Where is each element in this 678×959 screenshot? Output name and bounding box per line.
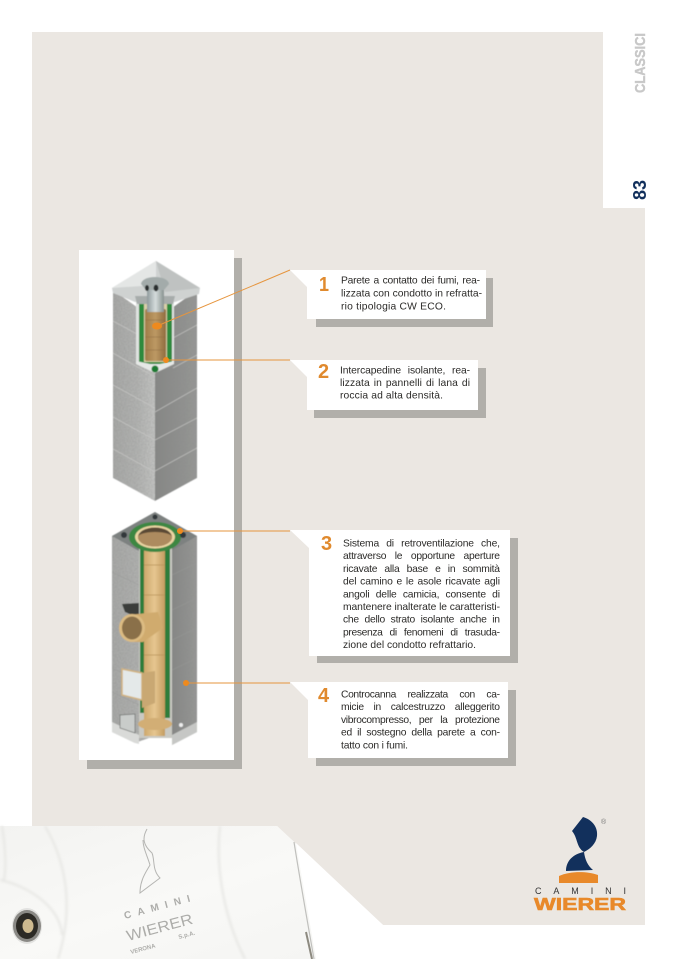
callout 3: 3: [321, 533, 332, 555]
logo wordmark: CAMINI: CAMINI: [535, 886, 626, 896]
callout 4: Controcanna realizzata con ca-: [341, 690, 500, 700]
panel: chimney illustrations: [79, 250, 290, 769]
leader 4: [183, 680, 290, 686]
photo detail: embossed text: WIERER: [125, 911, 195, 945]
callout 3: ricavate alla base e in sommità: [343, 564, 500, 575]
callout 3: zione del condotto refrattario.: [343, 640, 476, 651]
registered mark: ®: [601, 818, 607, 826]
callout 4: micie in calcestruzzo alleggerito: [341, 702, 500, 713]
callout 2: lizzata in pannelli di lana di: [340, 378, 470, 389]
page number: 83: [630, 180, 650, 200]
callout 1: lizzata con condotto in refratta-: [341, 288, 482, 300]
photo detail: embossed text: CAMINI: [123, 894, 192, 922]
callout 3: attraverso le opportune aperture: [343, 551, 500, 562]
callout 3: che dello strato isolante anche in: [343, 615, 500, 626]
leader 3: [177, 528, 290, 534]
callout 1: rio tipologia CW ECO.: [341, 302, 446, 312]
callout 2: Intercapedine isolante, rea-: [340, 366, 470, 376]
chimney 1: cutaway with flue and insulation: [112, 261, 200, 501]
callout 4: tatto con i fumi.: [341, 740, 408, 751]
photo detail: bolt: [12, 908, 42, 944]
callout 4: ed il sostegno della parete a con-: [341, 728, 500, 739]
leader 1: [152, 270, 290, 330]
callout 3: Sistema di retroventilazione che,: [343, 538, 500, 550]
section label: CLASSICI: CLASSICI: [633, 33, 649, 93]
photo: white embossed flue cap: [0, 826, 383, 959]
callout 3: angoli delle camicia, consente di: [343, 589, 500, 600]
photo detail: embossed text: VERONA: [130, 943, 157, 956]
logo: Camini Wierer: [534, 817, 626, 914]
callout 3: mantenere inalterate le caratteristi-: [343, 602, 500, 613]
callout 2: 2: [318, 361, 329, 383]
photo detail: embossed mark: [140, 829, 160, 893]
logo wordmark: WIERER: WIERER: [534, 894, 626, 914]
leader 2: [163, 357, 290, 363]
callout 3: del camino e le asole ricavate agli: [343, 577, 500, 588]
photo detail: embossed text: S.p.A.: [178, 931, 196, 941]
callout 2: roccia ad alta densità.: [340, 390, 443, 402]
callout 3: [290, 530, 518, 663]
callout 1: [290, 270, 493, 327]
chimney 2: section with side connector and inspection door: [112, 512, 197, 745]
logo mark: orange base: [559, 872, 598, 883]
photo detail: embossed text: [123, 894, 196, 956]
callout 1: Parete a contatto dei fumi, rea-: [341, 276, 480, 286]
callout 1: 1: [319, 274, 329, 296]
callout 3: presenza di fenomeni di trasuda-: [343, 627, 500, 638]
logo mark: blue figure: [566, 817, 597, 871]
callout 4: 4: [318, 685, 330, 707]
callout 4: vibrocompresso, per la protezione: [341, 715, 500, 726]
callout 2: [290, 360, 486, 418]
callout 4: [290, 682, 516, 766]
